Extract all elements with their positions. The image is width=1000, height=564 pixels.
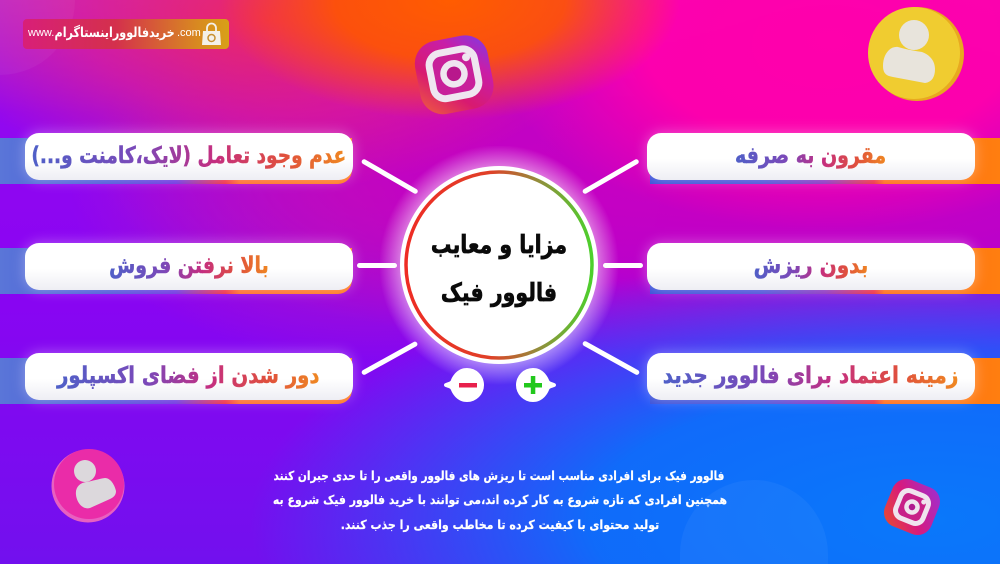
panel: right card 2	[639, 234, 1000, 298]
panel: left card 3	[0, 344, 362, 408]
icon: instagram small	[884, 479, 940, 535]
center title: مزایا و معایب	[431, 231, 567, 260]
label: trust for new followers	[647, 353, 975, 400]
center circle	[380, 146, 618, 383]
icon: yellow user coin	[868, 7, 964, 101]
icon: instagram 3D top	[414, 35, 494, 114]
icon: shopping bag	[202, 22, 221, 45]
logo website text: .com	[177, 27, 201, 39]
panel: left card 2	[0, 234, 361, 298]
panel: right card 3	[640, 346, 1000, 408]
logo website text	[28, 24, 201, 41]
logo website text: www.	[28, 27, 54, 39]
icon: pink user coin	[52, 449, 124, 522]
panel: right card 1	[638, 124, 1000, 189]
label: economical: مقرون به صرفه	[735, 143, 887, 169]
logo website text: خریدفالووراینستاگرام	[54, 25, 175, 41]
icon: plus bubble	[516, 368, 556, 402]
label: no engagement: عدم وجود تعامل (لایک،کامنت و...)	[32, 143, 346, 169]
label: trust for new followers: زمینه اعتماد برای فالوور جدید	[663, 363, 959, 389]
label: away from explore: دور شدن از فضای اکسپلور	[57, 363, 319, 389]
description paragraph	[273, 468, 727, 532]
label: no drop: بدون ریزش	[754, 253, 868, 279]
center title	[431, 231, 567, 308]
label: no sales growth	[25, 243, 353, 290]
label: economical	[647, 133, 975, 180]
label: no sales growth: بالا نرفتن فروش	[109, 253, 269, 279]
description paragraph: تولید محتوای با کیفیت کرده تا مخاطب واقعی را جذب کنند.	[341, 517, 659, 532]
description paragraph: همچنین افرادی که تازه شروع به کار کرده اند،می توانند با خرید فالوور فیک شروع به	[273, 492, 727, 507]
logo badge	[23, 19, 229, 49]
icon: minus bubble	[444, 368, 484, 402]
center title: فالوور فیک	[441, 279, 557, 308]
description paragraph: فالوور فیک برای افرادی مناسب است تا ریزش های فالوور واقعی را تا حدی جبران کنند	[274, 468, 724, 483]
panel: left card 1	[0, 124, 362, 188]
label: no drop	[647, 243, 975, 290]
label: away from explore	[25, 353, 353, 400]
label: no engagement	[25, 133, 353, 180]
